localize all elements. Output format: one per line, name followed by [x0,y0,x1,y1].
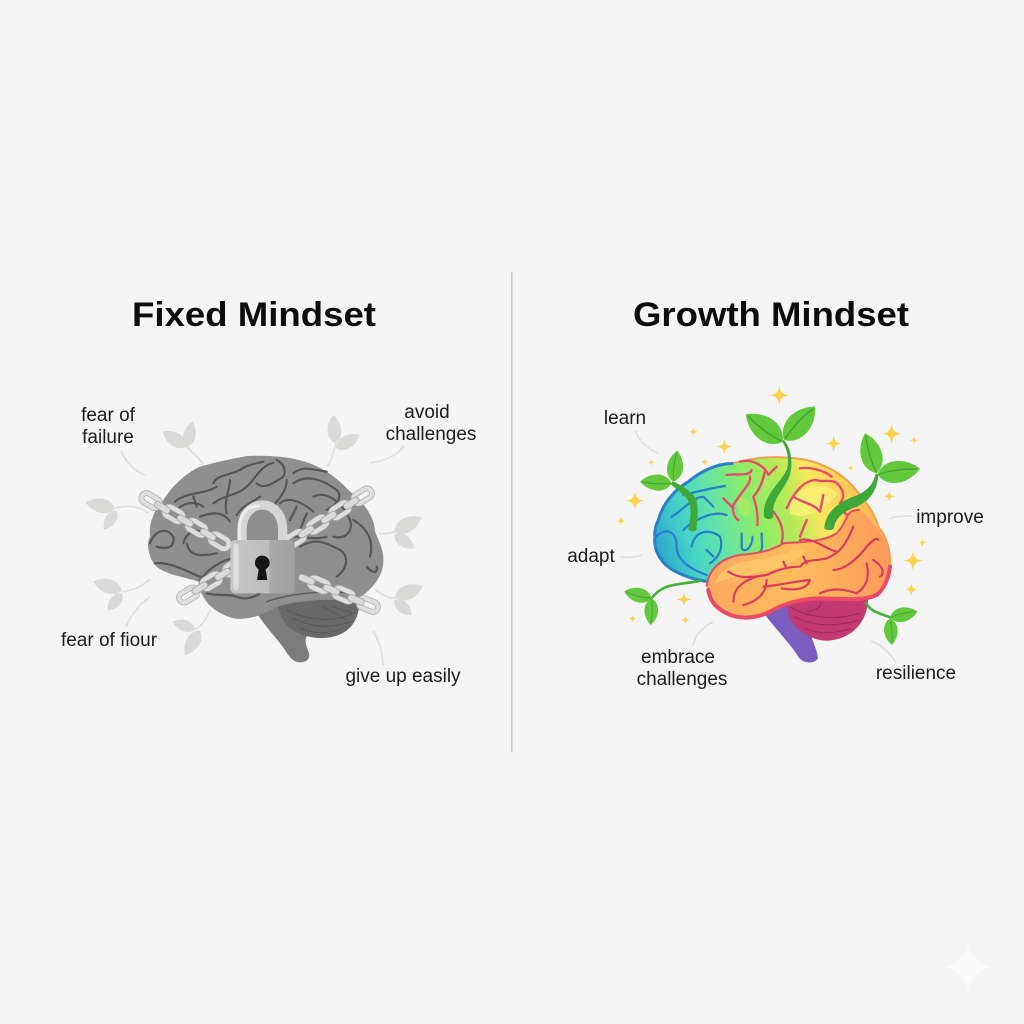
blue edge [655,463,733,582]
panel: growth mindset illustration [616,385,927,662]
temporal crimson underside [708,567,890,618]
faded leaf sprigs [85,415,426,659]
warm folds [723,461,855,547]
label: avoid challenges: avoid [404,402,450,423]
chain: upper left [140,491,231,551]
cerebellum [277,590,360,638]
label: fear of failure: failure [82,427,134,448]
chain: lower right [297,572,379,613]
brain silhouette [148,456,383,619]
cerebrum [655,457,890,600]
panel: fixed mindset illustration [85,415,426,662]
brain folds [150,460,377,602]
title: Fixed Mindset: Fixed Mindset [132,296,377,334]
highlights [737,496,751,516]
brain stem [764,600,818,662]
label: improve: improve [916,507,984,528]
temporal outline [707,510,860,587]
shackle [242,505,283,545]
temporal lobe [707,510,890,618]
lock body [230,540,295,593]
cerebellum [787,590,868,641]
label: fear of failure: fear of [81,405,136,426]
label: learn: learn [604,408,646,429]
label: embrace challenges: embrace [641,647,715,668]
temporal folds [728,527,883,605]
cool folds [656,486,762,575]
brain stem [255,600,309,662]
label: resilience: resilience [876,663,956,684]
chain: upper right [284,486,374,548]
label: avoid challenges: challenges [386,424,476,445]
keyhole [255,556,270,580]
growth labels and leader lines [567,408,984,690]
title: Growth Mindset: Growth Mindset [633,296,910,334]
sprout: right [824,430,921,530]
sprout: lower right [866,603,919,645]
temporal highlight [715,550,807,583]
chain: lower left [177,558,245,604]
watermark sparkle [944,944,992,992]
sprout: top center [739,399,824,519]
sprout: upper left [640,450,698,531]
leader lines [620,431,912,663]
sprout: lower left [622,581,700,625]
label: give up easily: give up easily [345,666,461,687]
leader lines [121,446,404,665]
padlock [230,505,295,593]
center divider [511,272,513,752]
fixed labels and leader lines [61,402,476,687]
label: embrace challenges: challenges [637,669,727,690]
label: fear of fiour: fear of fiour [61,630,158,651]
sparkles [616,385,927,625]
label: adapt: adapt [567,546,615,567]
